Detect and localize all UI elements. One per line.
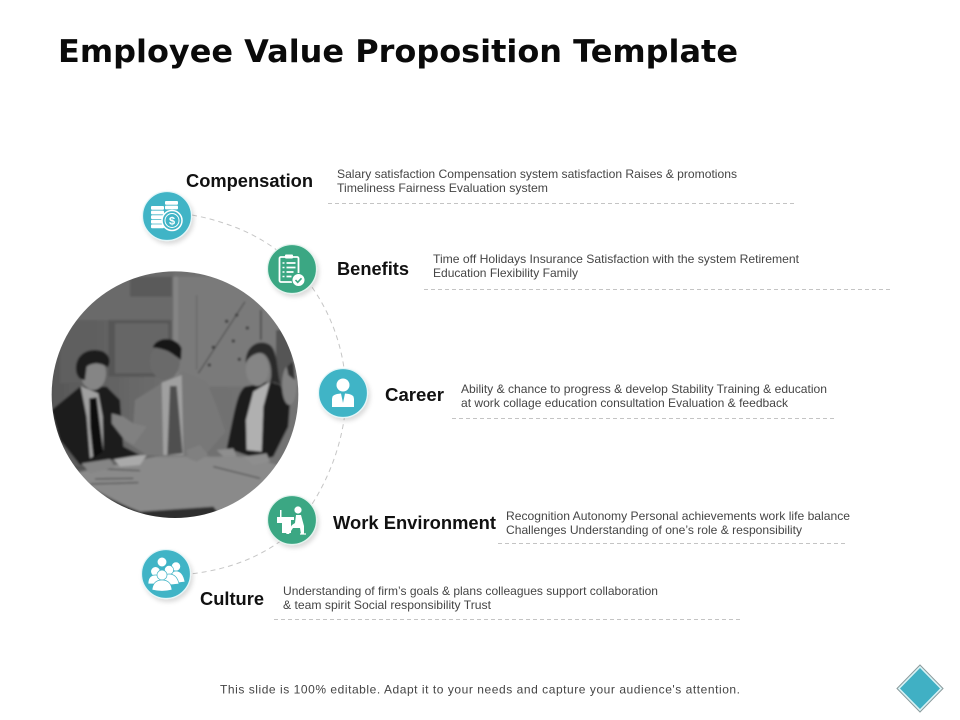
- label: Culture: & team spirit Social responsibility Trust: [283, 598, 492, 612]
- icon: benefits clipboard: [268, 244, 316, 294]
- label: Work Environment: Challenges Understanding of one’s role & responsibility: [506, 523, 802, 537]
- right woman: [227, 382, 290, 460]
- icon: work environment desk: [268, 496, 316, 544]
- label: Work Environment: Work Environment: [333, 513, 496, 533]
- description: compensation: Salary satisfaction Compensation system satisfaction Raises & promotions: [337, 167, 737, 181]
- icon: culture group: [142, 550, 190, 598]
- label: Benefits: Benefits: [337, 259, 409, 279]
- team meeting photo: [47, 267, 307, 523]
- description: career: Ability & chance to progress & develop Stability Training & education: [461, 382, 827, 396]
- title: Employee Value Proposition Template: [58, 34, 738, 70]
- table: [73, 457, 283, 513]
- icon: diamond navigation: [897, 665, 943, 712]
- label: Compensation: Compensation: [186, 171, 313, 191]
- left man: [52, 387, 140, 465]
- label: Benefits: Education Flexibility Family: [433, 266, 578, 280]
- label: Compensation: [186, 167, 795, 204]
- label: Compensation: Timeliness Fairness Evaluation system: [337, 181, 548, 195]
- label: Career: at work collage education consultation Evaluation & feedback: [461, 396, 789, 410]
- center man: [132, 386, 185, 455]
- description: benefits: Time off Holidays Insurance Satisfaction with the system Retirement: [433, 252, 800, 266]
- description: work environment: Recognition Autonomy Personal achievements work life balance: [506, 509, 850, 523]
- description: culture: Understanding of firm’s goals & plans colleagues support collaboration: [283, 584, 658, 598]
- label: Work Environment: [333, 509, 850, 544]
- dashed arc connecting icons: [190, 215, 346, 574]
- icon: compensation coins: [142, 192, 192, 240]
- footer note: This slide is 100% editable. Adapt it to your needs and capture your audience's attention.: [220, 682, 740, 696]
- icon: compensation coins: $: [169, 216, 175, 228]
- label: Benefits: [337, 252, 890, 290]
- label: Career: [385, 382, 834, 418]
- chart on wall: [198, 302, 245, 373]
- label: Career: Career: [385, 385, 444, 405]
- label: Culture: Culture: [200, 589, 264, 609]
- label: Culture: [200, 584, 741, 620]
- icon: career person: [318, 368, 368, 418]
